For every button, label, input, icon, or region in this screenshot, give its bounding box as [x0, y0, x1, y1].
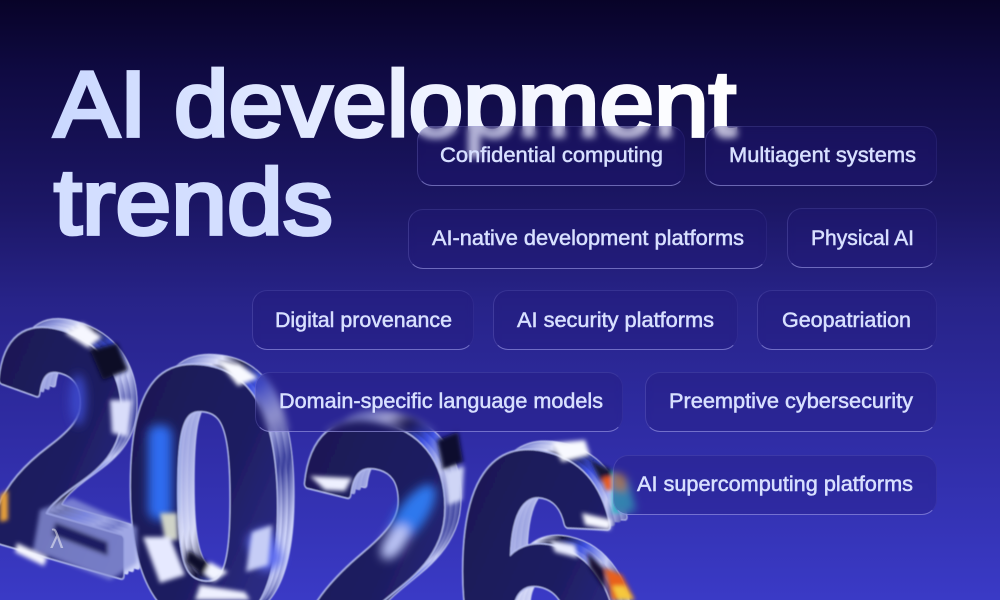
card: AI supercomputing platforms: AI supercomputing platforms — [637, 473, 913, 496]
card: Physical AI: Physical AI — [811, 227, 914, 250]
card: Domain-specific language models — [255, 372, 623, 432]
card: Confidential computing — [417, 126, 685, 186]
card: Preemptive cybersecurity — [645, 372, 937, 432]
card: AI-native development platforms — [408, 209, 767, 269]
card: Physical AI — [787, 208, 937, 268]
card: Digital provenance: Digital provenance — [275, 309, 452, 332]
card: Multiagent systems: Multiagent systems — [729, 144, 916, 167]
card: AI-native development platforms: AI-native development platforms — [432, 227, 744, 250]
card: Confidential computing: Confidential computing — [440, 144, 663, 167]
card: Geopatriation: Geopatriation — [782, 309, 911, 332]
title: trends — [54, 150, 333, 254]
icon: logo mark: λ — [50, 524, 64, 554]
title: AI development — [54, 52, 736, 156]
card: Geopatriation — [757, 290, 937, 350]
glass highlights on numerals — [0, 323, 636, 600]
card: AI security platforms — [493, 290, 738, 350]
card: AI security platforms: AI security platforms — [517, 309, 714, 332]
card: Domain-specific language models: Domain-specific language models — [279, 390, 603, 413]
card: AI supercomputing platforms — [613, 455, 937, 515]
card: Preemptive cybersecurity: Preemptive cybersecurity — [669, 390, 914, 413]
card: Digital provenance — [252, 290, 474, 350]
card: Multiagent systems — [705, 126, 937, 186]
